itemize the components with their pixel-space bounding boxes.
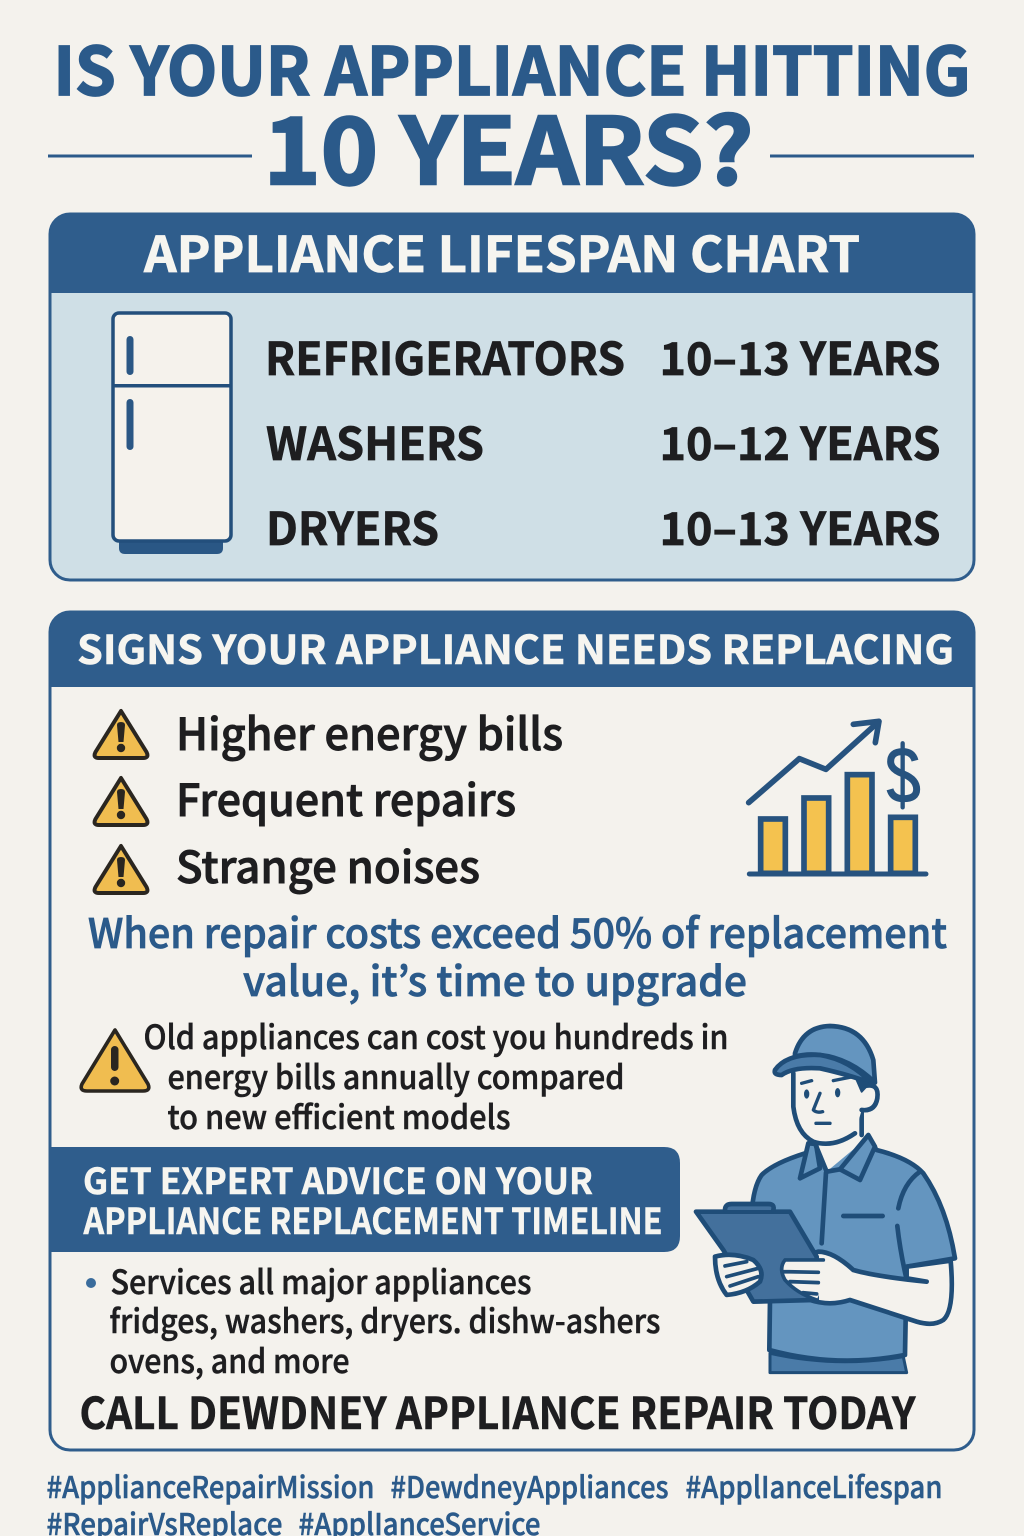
warning signs text: Strange noises bbox=[176, 832, 480, 896]
panel: signs your appliance needs replacing bbox=[50, 612, 974, 1450]
icon: energy warning bbox=[81, 1030, 149, 1091]
title: 10 YEARS? bbox=[264, 78, 754, 211]
warning signs text: Frequent repairs bbox=[176, 765, 516, 829]
hashtags bbox=[46, 1463, 942, 1536]
hashtags: #ApplianceRepairMission bbox=[46, 1463, 374, 1507]
lifespan rows: 10–12 YEARS bbox=[660, 408, 940, 473]
lifespan rows: 10–13 YEARS bbox=[660, 493, 940, 558]
services list: ovens, and more bbox=[110, 1335, 350, 1383]
lifespan header bbox=[50, 214, 974, 293]
lifespan rows: 10–13 YEARS bbox=[660, 323, 940, 388]
energy warning text: energy bills annually compared bbox=[168, 1051, 624, 1099]
callout: repair cost rule bbox=[88, 900, 947, 1008]
lifespan rows bbox=[265, 323, 940, 558]
lifespan rows: REFRIGERATORS bbox=[265, 323, 625, 388]
lifespan rows: DRYERS bbox=[266, 493, 439, 558]
energy warning text bbox=[144, 1011, 728, 1139]
title bbox=[48, 19, 974, 211]
services list: fridges, washers, dryers. dishw-ashers bbox=[110, 1295, 660, 1343]
icon: rising cost bar chart bbox=[749, 721, 926, 874]
title: IS YOUR APPLIANCE HITTING bbox=[54, 19, 970, 115]
icon: refrigerator bbox=[113, 313, 231, 554]
banner: expert advice: APPLIANCE REPLACEMENT TIMELINE bbox=[83, 1193, 662, 1245]
callout: repair cost rule: value, it’s time to upgrade bbox=[243, 948, 747, 1008]
services list bbox=[86, 1256, 660, 1383]
services list: Services all major appliances bbox=[110, 1256, 532, 1304]
call to action: CALL DEWDNEY APPLIANCE REPAIR TODAY bbox=[80, 1378, 916, 1442]
icon: warning 2 bbox=[95, 778, 147, 825]
hashtags: #DewdneyAppliances bbox=[390, 1463, 668, 1507]
warning signs text bbox=[176, 699, 563, 896]
lifespan rows: WASHERS bbox=[266, 408, 484, 473]
energy warning text: Old appliances can cost you hundreds in bbox=[144, 1011, 728, 1059]
illustration: technician with clipboard bbox=[696, 1026, 955, 1373]
banner: expert advice: GET EXPERT ADVICE ON YOUR bbox=[83, 1153, 593, 1205]
banner: expert advice bbox=[51, 1147, 680, 1252]
lifespan header: APPLIANCE LIFESPAN CHART bbox=[143, 216, 860, 287]
hashtags: #ApplIanceLifespan bbox=[686, 1463, 942, 1507]
callout: repair cost rule: When repair costs exceed 50% of replacement bbox=[88, 900, 947, 960]
icon: warning 1 bbox=[95, 711, 147, 758]
icon: warning 3 bbox=[95, 846, 147, 893]
signs header: SIGNS YOUR APPLIANCE NEEDS REPLACING bbox=[77, 618, 954, 676]
warning list bbox=[95, 699, 563, 896]
energy warning text: to new efficient models bbox=[168, 1091, 510, 1139]
panel: appliance lifespan chart bbox=[50, 214, 974, 580]
warning signs text: Higher energy bills bbox=[176, 699, 563, 763]
